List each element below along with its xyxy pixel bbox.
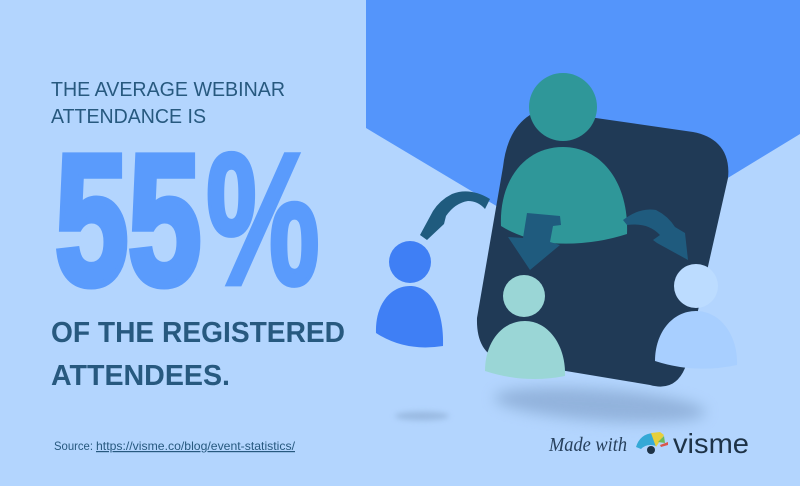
closing heading: OF THE REGISTERED: [51, 317, 345, 349]
dark rounded card: [477, 110, 728, 387]
intro heading: ATTENDANCE IS: [51, 105, 206, 128]
arrow: to blue person: [420, 191, 490, 240]
intro heading: [51, 78, 285, 128]
closing heading: ATTENDEES.: [51, 360, 230, 392]
blue background shape: [366, 0, 800, 262]
arrow: to light person: [623, 209, 688, 260]
visme logo icon: [636, 432, 668, 454]
big number 55%: %: [206, 114, 320, 325]
visme wordmark: visme: [673, 428, 749, 459]
intro heading: THE AVERAGE WEBINAR: [51, 78, 285, 101]
person: mint: [485, 275, 565, 379]
big number 55%: 5: [128, 117, 201, 324]
source line: https://visme.co/blog/event-statistics/: [96, 439, 296, 453]
closing heading: [51, 317, 345, 392]
arrow: to mint person: [508, 213, 561, 270]
big number 55%: 5: [55, 117, 128, 324]
floor shadow: large: [493, 382, 707, 428]
person: blue: [376, 241, 443, 347]
source line: Source:: [54, 439, 93, 453]
big number 55%: [55, 114, 320, 325]
person: light blue: [655, 264, 737, 369]
floor shadow: small: [395, 412, 449, 420]
made with label: Made with: [548, 434, 627, 456]
person: teal: [501, 73, 627, 244]
